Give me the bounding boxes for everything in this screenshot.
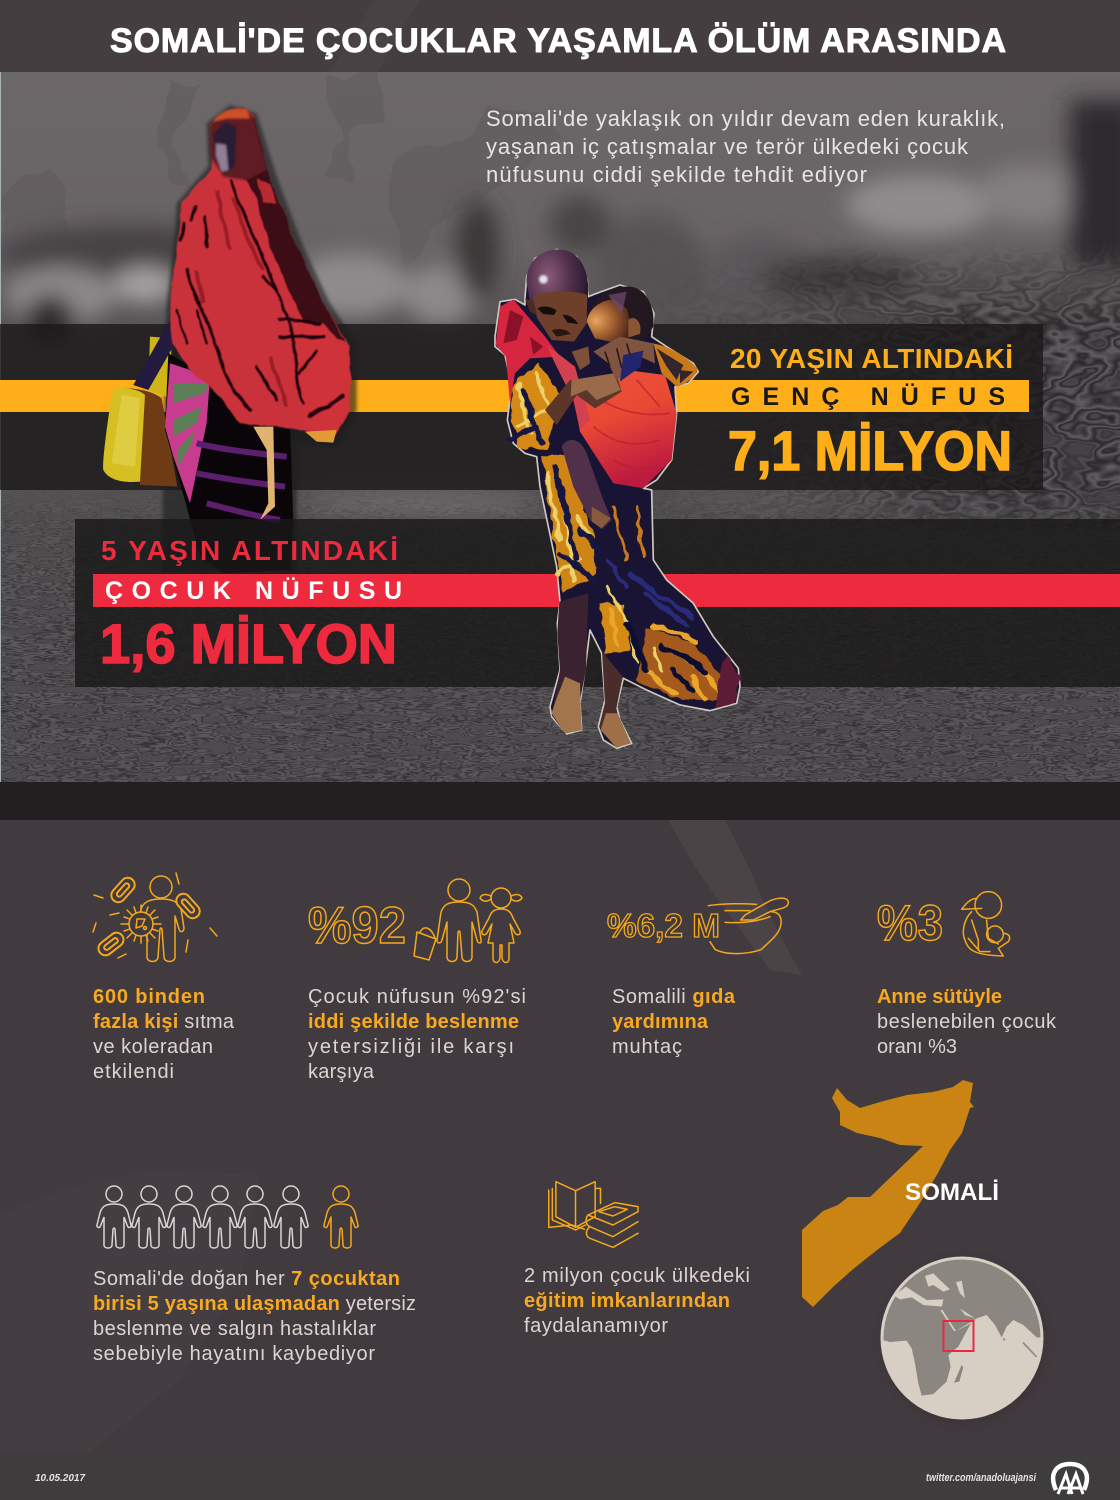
text: education bbox=[524, 1265, 750, 1337]
second jerrycan bbox=[148, 337, 172, 398]
neck of child bbox=[572, 347, 590, 370]
band: top stat backing bbox=[0, 324, 1043, 490]
text: food aid: Somalili gıda bbox=[612, 986, 736, 1008]
stat: under 5 population: ÇOCUK NÜFUSU bbox=[105, 576, 402, 605]
text: malnutrition: yetersizliği ile karşı bbox=[308, 1036, 514, 1058]
footer bar: twitter.com/anadoluajansi bbox=[926, 1472, 1037, 1484]
stat: under 5 population: 1,6 MİLYON bbox=[100, 612, 397, 675]
icon: sick person with germs bbox=[93, 873, 217, 962]
text: breastfeeding bbox=[877, 986, 1057, 1058]
text: child mortality: Somali'de doğan her 7 çocuktan bbox=[93, 1268, 400, 1290]
woman shadow halo bbox=[162, 105, 357, 573]
branch texture bbox=[708, 252, 1120, 519]
lower panel map shapes bbox=[0, 820, 802, 1452]
intro paragraph: nüfusunu ciddi şekilde tehdit ediyor bbox=[486, 162, 867, 187]
child silhouette outline bbox=[495, 249, 740, 748]
red cloth on shoulder bbox=[496, 299, 560, 403]
text: disease: etkilendi bbox=[93, 1061, 174, 1083]
icon: %6,2 M with bowl bbox=[607, 898, 788, 954]
head of baby bbox=[587, 287, 654, 342]
text: food aid: yardımına bbox=[612, 1011, 709, 1033]
bar: red bbox=[93, 574, 1120, 607]
icon: %3 with mother and baby bbox=[877, 892, 1010, 956]
text: food aid bbox=[612, 986, 736, 1058]
text: education: faydalanamıyor bbox=[524, 1315, 668, 1337]
footer bar: 10.05.2017 bbox=[35, 1473, 85, 1484]
stat: under 20 population: GENÇ NÜFUS bbox=[731, 382, 1005, 411]
text: breastfeeding: beslenebilen çocuk bbox=[877, 1011, 1057, 1033]
icon: %92 with adult, child, bucket bbox=[308, 879, 522, 962]
text: child mortality: sebebiyle hayatını kaybediyor bbox=[93, 1343, 375, 1365]
figure: woman in red cloak bbox=[103, 105, 357, 573]
child arm and hand bbox=[545, 375, 622, 425]
intro paragraph: yaşanan iç çatışmalar ve terör ülkedeki çocuk bbox=[486, 134, 969, 159]
text: malnutrition: iddi şekilde beslenme bbox=[308, 1011, 519, 1033]
locator square bbox=[944, 1321, 974, 1351]
footer bar bbox=[0, 1452, 1120, 1500]
baby arm bbox=[593, 337, 655, 380]
text: disease: fazla kişi sıtma bbox=[93, 1011, 235, 1033]
legs and feet bbox=[552, 593, 631, 747]
blurred crowd and rocks bbox=[0, 100, 1120, 518]
logo: AA bbox=[1053, 1464, 1087, 1494]
icon: %6,2 M with bowl: %6,2 M bbox=[607, 907, 720, 944]
text: child mortality: birisi 5 yaşına ulaşmadan yetersiz bbox=[93, 1293, 416, 1315]
text: breastfeeding: Anne sütüyle bbox=[877, 986, 1002, 1008]
label: Somali: SOMALİ bbox=[905, 1179, 999, 1206]
hem bbox=[305, 430, 337, 443]
red cloak bbox=[170, 108, 350, 437]
stat: under 20 population: 7,1 MİLYON bbox=[728, 419, 1012, 482]
jerrycan bbox=[103, 387, 177, 487]
right sleeve bbox=[653, 343, 697, 387]
stat: under 20 population bbox=[728, 343, 1013, 482]
left edge line bbox=[0, 72, 1, 782]
icon: books bbox=[549, 1182, 638, 1247]
dark divider band bbox=[0, 782, 1120, 820]
stat: under 5 population bbox=[100, 535, 402, 675]
icon: seven people, one highlighted bbox=[97, 1186, 358, 1248]
band: lower stat backing bbox=[75, 519, 1120, 687]
sling bbox=[575, 370, 677, 488]
figure: child carrying baby bbox=[495, 249, 740, 748]
intro paragraph: Somali'de yaklaşık on yıldır devam eden kuraklık, bbox=[486, 106, 1005, 131]
map: Somalia bbox=[802, 1080, 974, 1307]
arm bbox=[133, 320, 175, 390]
title: SOMALİ'DE ÇOCUKLAR YAŞAMLA ÖLÜM ARASINDA bbox=[110, 22, 1006, 60]
baby leg bbox=[562, 440, 612, 529]
text: disease: ve koleradan bbox=[93, 1036, 213, 1058]
skirt bbox=[165, 353, 293, 573]
text: malnutrition: Çocuk nüfusun %92'si bbox=[308, 986, 526, 1008]
text: disease bbox=[93, 986, 235, 1083]
text: child mortality: beslenme ve salgın hastalıklar bbox=[93, 1318, 376, 1340]
icon: %92 with adult, child, bucket: %92 bbox=[308, 897, 406, 955]
cloak shaded side bbox=[233, 117, 347, 343]
intro paragraph bbox=[486, 106, 1005, 187]
text: malnutrition bbox=[308, 986, 526, 1083]
text: food aid: muhtaç bbox=[612, 1036, 682, 1058]
globe locator bbox=[880, 1250, 1047, 1422]
map silhouettes in sky bbox=[0, 75, 560, 280]
stat: under 20 population: 20 YAŞIN ALTINDAKİ bbox=[730, 343, 1013, 374]
cloak folds bbox=[177, 180, 343, 417]
head of child bbox=[525, 249, 588, 342]
text: malnutrition: karşıya bbox=[308, 1061, 375, 1083]
stat: under 5 population: 5 YAŞIN ALTINDAKİ bbox=[101, 535, 398, 566]
dress painted streaks bbox=[510, 363, 739, 708]
text: breastfeeding: oranı %3 bbox=[877, 1036, 957, 1058]
icon: %3 with mother and baby: %3 bbox=[877, 895, 943, 951]
header bar bbox=[0, 0, 1120, 72]
text: education: eğitim imkanlarından bbox=[524, 1290, 730, 1312]
text: disease: 600 binden bbox=[93, 986, 205, 1008]
ground texture bbox=[0, 490, 1120, 790]
text: education: 2 milyon çocuk ülkedeki bbox=[524, 1265, 750, 1287]
hood and face bbox=[210, 107, 267, 180]
panel: photo background bbox=[0, 72, 1120, 790]
bar: yellow bbox=[0, 380, 1029, 412]
text: child mortality bbox=[93, 1268, 416, 1365]
